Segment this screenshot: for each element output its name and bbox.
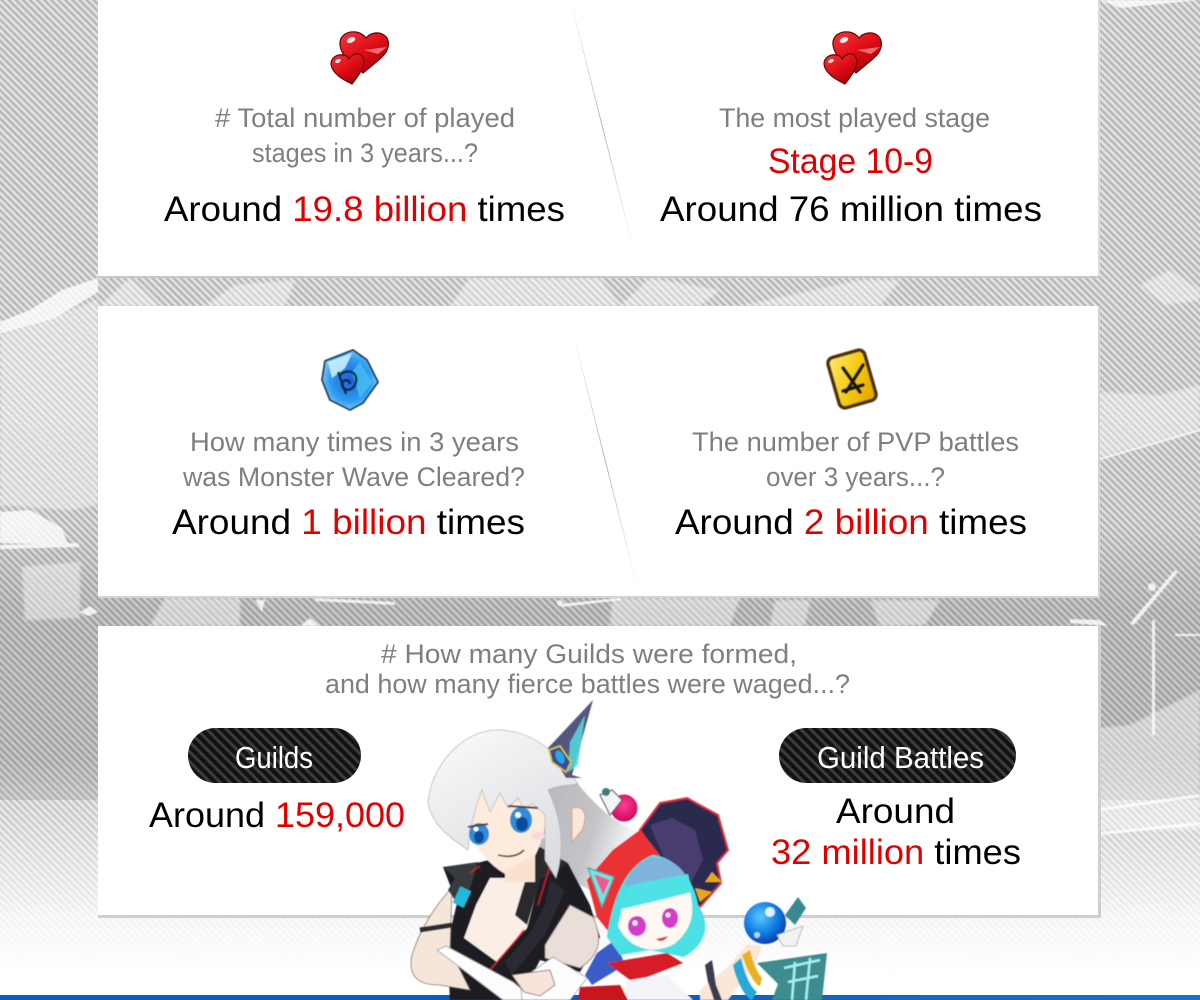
question: monster wave: How many times in 3 years xyxy=(190,427,519,457)
answer: 76 million times: Around 76 million times xyxy=(660,190,1042,229)
pill: Guilds: Guilds xyxy=(235,740,313,775)
panel: guilds xyxy=(98,626,1101,918)
character: blue-haired girl xyxy=(578,798,762,1000)
icon: blue potion xyxy=(744,897,806,946)
question: guilds and battles xyxy=(325,639,850,699)
answer: 32 million times xyxy=(771,792,1021,872)
question: total played stages: stages in 3 years...? xyxy=(252,138,478,168)
answer: 2 billion times: Around 2 billion times xyxy=(675,503,1027,542)
question: most played stage: The most played stage xyxy=(719,103,990,133)
divider line xyxy=(572,8,633,246)
answer: 1 billion times: Around 1 billion times xyxy=(172,503,525,542)
icon: red hearts xyxy=(331,32,388,84)
panel: played stages xyxy=(98,0,1100,278)
question: PVP battles: The number of PVP battles xyxy=(692,427,1019,457)
answer: 32 million times: Around xyxy=(836,792,955,831)
icon: cyan weapon xyxy=(757,953,827,1000)
answer: 159,000: Around 159,000 xyxy=(149,796,405,835)
question: PVP battles xyxy=(692,427,1019,492)
divider line xyxy=(575,343,636,580)
question: total played stages xyxy=(215,103,515,168)
icon: red hearts xyxy=(824,32,881,84)
pill: Guilds xyxy=(188,728,361,783)
question: monster wave xyxy=(182,427,525,492)
question: guilds and battles: # How many Guilds were formed, xyxy=(381,639,797,669)
question: PVP battles: over 3 years...? xyxy=(766,462,945,492)
icon: blue gem xyxy=(322,350,378,410)
character: white-haired girl xyxy=(411,700,640,1000)
pill: Guild Battles: Guild Battles xyxy=(817,740,984,775)
answer: 32 million times: 32 million times xyxy=(771,833,1021,872)
question: total played stages: # Total number of played xyxy=(215,103,515,133)
blue footer bar xyxy=(0,995,1200,1000)
panel: monster wave and PVP xyxy=(98,306,1100,598)
question: guilds and battles: and how many fierce battles were waged...? xyxy=(325,669,850,699)
answer: 19.8 billion times: Around 19.8 billion times xyxy=(164,190,565,229)
icon: yellow PVP card xyxy=(827,349,877,409)
icon: pink potion xyxy=(600,788,638,822)
pill: Guild Battles xyxy=(779,728,1016,783)
question: monster wave: was Monster Wave Cleared? xyxy=(182,462,525,492)
stage name: Stage 10-9 xyxy=(768,142,933,181)
